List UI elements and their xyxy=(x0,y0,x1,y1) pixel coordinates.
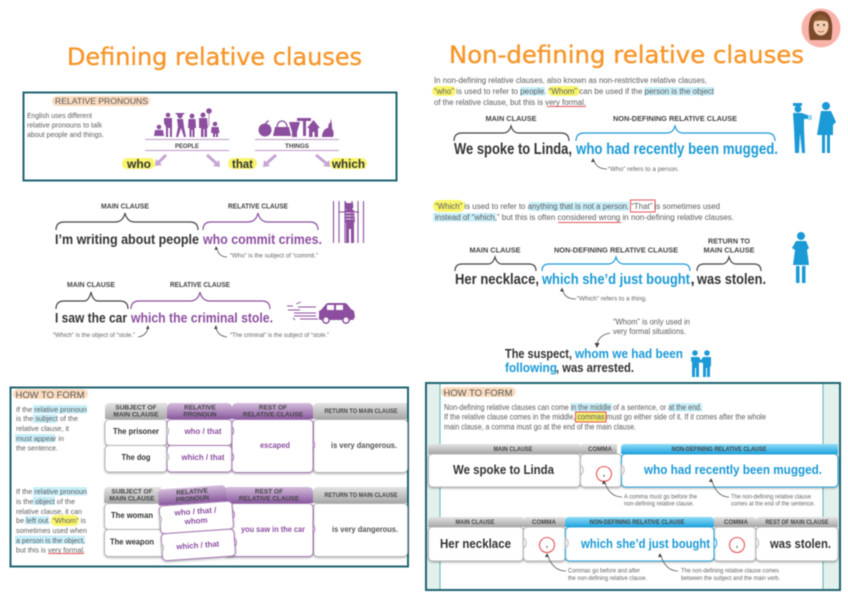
example: who had recently been mugged: “Who” refers to a person. xyxy=(608,166,679,173)
puzzle: main clause at end: non-defining relative clause. xyxy=(624,500,694,508)
table: subject pronoun puzzle: RELATIVE xyxy=(184,404,216,412)
text: position of commas xyxy=(444,403,766,432)
example: which the criminal stole: I saw the car xyxy=(55,310,127,326)
table: subject pronoun puzzle: The prisoner xyxy=(113,426,160,436)
puzzle: main clause at end: who had recently been mugged. xyxy=(643,462,822,477)
puzzle: main clause at end: We spoke to Linda xyxy=(453,462,555,477)
table: object pronoun puzzle: you saw in the car xyxy=(241,525,305,534)
note: whom is formal: very formal situations. xyxy=(613,327,686,336)
example: who commit crimes xyxy=(55,202,322,260)
text: intro: English uses different xyxy=(27,111,93,120)
table: subject pronoun puzzle: escaped xyxy=(260,440,290,450)
puzzle: main clause at end xyxy=(428,444,838,508)
puzzle: clause in middle: between the subject and the main verb. xyxy=(681,575,780,582)
text: position of commas: Non-defining relative clauses can come in the middle of a sentence, or at the end. xyxy=(444,403,702,412)
table: object pronoun puzzle: is very dangerous. xyxy=(332,525,398,534)
table: subject pronoun puzzle: who / that xyxy=(184,427,222,436)
example: which the criminal stole xyxy=(53,280,329,339)
text: subject rule: is the subject of the xyxy=(16,414,78,423)
heading: how to form: HOW TO FORM xyxy=(444,388,513,399)
example: who had recently been mugged: We spoke to Linda, xyxy=(454,141,572,158)
example: which the criminal stole: “Which” is the object of “stole.” xyxy=(53,332,135,339)
pronoun: that: that xyxy=(232,157,253,171)
example: which she'd just bought: was stolen. xyxy=(696,271,766,288)
text: intro: relative pronouns to talk xyxy=(27,120,102,130)
text: who explanation: In non-defining relative clauses, also known as non-restrictive relative clauses, xyxy=(434,76,707,85)
example: which the criminal stole: MAIN CLAUSE xyxy=(67,280,115,289)
text: object rule: is the object of the xyxy=(16,497,75,506)
puzzle: main clause at end: A comma must go before the xyxy=(624,494,697,500)
panel: non-defining which xyxy=(433,200,809,302)
label: things: THINGS xyxy=(285,143,310,150)
rotated pronoun column: RELATIVE xyxy=(176,488,209,497)
text: object rule: but this is very formal. xyxy=(16,546,85,554)
sentence: the suspect: , was arrested. xyxy=(556,360,634,375)
puzzle: clause in middle: The non-defining relative clause comes xyxy=(681,568,780,574)
puzzle: main clause at end: MAIN CLAUSE xyxy=(494,446,533,453)
icon: two people xyxy=(691,350,711,377)
sentence: the suspect: whom we had been xyxy=(574,346,683,361)
text: intro xyxy=(27,111,104,139)
panel: whom example xyxy=(505,318,711,377)
text: object rule: a person is the object, xyxy=(16,536,85,545)
table: subject pronoun puzzle: REST OF xyxy=(259,404,287,412)
text: which explanation: “Which” is used to refer to anything that is not a person. “That” is sometimes used xyxy=(435,202,720,211)
label: things xyxy=(255,140,339,150)
text: which explanation: instead of “which,” but this is often considered wrong in non-defining relative clauses. xyxy=(435,213,734,222)
note: whom is formal: “Whom” is only used in xyxy=(613,318,690,326)
table: object pronoun puzzle: REST OF xyxy=(255,488,283,496)
table: subject pronoun puzzle: MAIN CLAUSE xyxy=(113,412,159,418)
puzzle: main clause at end: NON-DEFINING RELATIVE CLAUSE xyxy=(672,446,767,453)
table: subject pronoun puzzle: RELATIVE CLAUSE xyxy=(243,412,304,418)
table: subject pronoun puzzle: SUBJECT OF xyxy=(115,404,157,412)
puzzle: clause in middle: , xyxy=(546,542,548,549)
puzzle: clause in middle: Commas go before and after xyxy=(568,568,641,574)
panel: how to form (defining) xyxy=(10,388,408,566)
panel: defining examples xyxy=(53,201,364,339)
rotated pronoun column: who / that / xyxy=(173,506,217,518)
example: which the criminal stole: “The criminal” is the subject of “stole.” xyxy=(230,332,329,339)
puzzle: main clause at end: COMMA xyxy=(588,446,612,453)
table: subject pronoun puzzle: RETURN TO MAIN CLAUSE xyxy=(324,408,398,415)
puzzle: main clause at end: , xyxy=(603,471,605,478)
icon: things xyxy=(258,118,334,137)
puzzle: clause in middle xyxy=(428,517,838,582)
example: who commit crimes: I’m writing about people xyxy=(55,231,199,247)
puzzle: clause in middle: NON-DEFINING RELATIVE CLAUSE xyxy=(590,519,685,526)
example: which she'd just bought: “Which” refers to a thing. xyxy=(577,296,647,302)
label: people: PEOPLE xyxy=(175,143,200,150)
puzzle: clause in middle: COMMA xyxy=(724,519,748,526)
example: which she'd just bought xyxy=(455,236,766,302)
example: which she'd just bought: which she’d just bought xyxy=(541,271,690,288)
table: subject pronoun puzzle: PRONOUN xyxy=(183,412,217,418)
puzzle: clause in middle: which she’d just bought xyxy=(580,536,711,551)
puzzle: clause in middle: the non-defining relative clause. xyxy=(568,575,647,582)
pronoun: which: which xyxy=(331,157,365,171)
table: object pronoun puzzle: MAIN CLAUSE xyxy=(109,496,155,502)
table: object pronoun puzzle: The weapon xyxy=(110,536,154,546)
pronoun: who: who xyxy=(126,157,151,171)
arrows: pronoun pointers xyxy=(155,155,330,167)
icon: prisoner behind bars xyxy=(334,201,364,243)
sentence: the suspect: following xyxy=(505,360,557,375)
puzzle: main clause at end: The non-defining relative clause xyxy=(731,494,811,500)
table: object pronoun puzzle: RETURN TO MAIN CLAUSE xyxy=(324,492,398,499)
panel: relative pronouns xyxy=(24,92,396,180)
text: object rule: relative clause, it can xyxy=(16,507,82,516)
puzzle: main clause at end: comes at the end of the sentence. xyxy=(731,500,815,508)
title: non-defining relative clauses: Non-defining relative clauses xyxy=(449,41,804,69)
text: object rule xyxy=(15,487,87,554)
icon: police officer and woman xyxy=(793,102,836,153)
text: subject rule: the sentence. xyxy=(16,444,58,452)
example: which she'd just bought: MAIN CLAUSE xyxy=(470,246,520,254)
text: subject rule: must appear in xyxy=(16,434,64,443)
text: who explanation: of the relative clause, but this is very formal. xyxy=(434,98,586,107)
heading: how to form: HOW TO FORM xyxy=(16,390,85,401)
icon: avatar badge xyxy=(802,8,840,48)
rotated pronoun column: whom xyxy=(183,516,208,526)
example: which she'd just bought: Her necklace, xyxy=(455,271,539,288)
text: who explanation xyxy=(432,76,715,107)
example: who commit crimes: who commit crimes. xyxy=(202,231,322,247)
rotated pronoun column: which / that xyxy=(175,539,220,551)
example: who had recently been mugged xyxy=(454,114,778,173)
example: who had recently been mugged: who had recently been mugged. xyxy=(575,141,778,158)
table: subject pronoun puzzle: The dog xyxy=(122,452,150,462)
table: object pronoun puzzle: SUBJECT OF xyxy=(111,488,153,496)
icon: people xyxy=(154,108,220,137)
puzzle: clause in middle: REST OF MAIN CLAUSE xyxy=(766,519,829,526)
example: which the criminal stole: RELATIVE CLAUSE xyxy=(170,280,230,289)
text: who explanation: “who” is used to refer to people. “Whom” can be used if the person is the object xyxy=(434,87,715,96)
example: which she'd just bought: RETURN TO xyxy=(708,236,750,246)
title: defining relative clauses: Defining relative clauses xyxy=(67,43,362,71)
icon: speeding car xyxy=(287,302,355,323)
panel: non-defining who xyxy=(432,76,836,173)
text: subject rule: If the relative pronoun xyxy=(16,405,87,414)
puzzle: clause in middle: Her necklace xyxy=(440,536,511,551)
puzzle: clause in middle: , xyxy=(736,542,738,549)
example: which the criminal stole: which the criminal stole. xyxy=(130,310,273,326)
heading: relative pronouns: RELATIVE PRONOUNS xyxy=(55,96,148,106)
icon: woman xyxy=(792,232,809,283)
text: object rule: sometimes used when xyxy=(16,526,87,535)
label: people xyxy=(145,140,229,150)
puzzle: clause in middle: COMMA xyxy=(532,519,556,526)
puzzle: clause in middle: MAIN CLAUSE xyxy=(456,519,495,526)
rotated pronoun column: PRONOUN xyxy=(176,495,210,504)
puzzle: clause in middle: was stolen. xyxy=(769,536,831,551)
example: who commit crimes: RELATIVE CLAUSE xyxy=(228,202,288,210)
text: subject rule xyxy=(15,405,87,452)
example: who commit crimes: “Who” is the subject of “commit.” xyxy=(230,252,318,260)
table: object pronoun puzzle: RELATIVE CLAUSE xyxy=(239,496,300,502)
sentence: the suspect xyxy=(505,346,683,375)
rotated pronoun column xyxy=(158,484,237,561)
table: subject pronoun puzzle xyxy=(105,403,408,472)
example: who commit crimes: MAIN CLAUSE xyxy=(101,202,149,210)
example: which she'd just bought: NON-DEFINING RELATIVE CLAUSE xyxy=(554,246,678,254)
text: intro: about people and things. xyxy=(27,130,104,139)
example: which she'd just bought: , xyxy=(690,271,695,288)
note: whom is formal xyxy=(594,318,690,348)
table: object pronoun puzzle xyxy=(104,484,408,561)
sentence: the suspect: The suspect, xyxy=(505,346,572,361)
text: subject rule: relative clause, it xyxy=(16,424,70,433)
example: who had recently been mugged: MAIN CLAUSE xyxy=(486,114,536,123)
table: subject pronoun puzzle: is very dangerous. xyxy=(331,441,397,450)
text: which explanation xyxy=(433,200,734,222)
example: which she'd just bought: MAIN CLAUSE xyxy=(704,246,754,254)
text: position of commas: If the relative clause comes in the middle, commas must go either side of it. If it comes after the whole xyxy=(444,412,766,422)
table: object pronoun puzzle: The woman xyxy=(111,510,153,520)
text: position of commas: main clause, a comma must go at the end of the main clause. xyxy=(444,422,636,432)
panel: how to form (non-defining) xyxy=(426,383,840,590)
table: subject pronoun puzzle: which / that xyxy=(181,453,225,462)
text: object rule: If the relative pronoun xyxy=(16,487,87,496)
example: who had recently been mugged: NON-DEFINING RELATIVE CLAUSE xyxy=(613,114,737,123)
text: object rule: be left out. “Whom” is xyxy=(16,516,86,525)
